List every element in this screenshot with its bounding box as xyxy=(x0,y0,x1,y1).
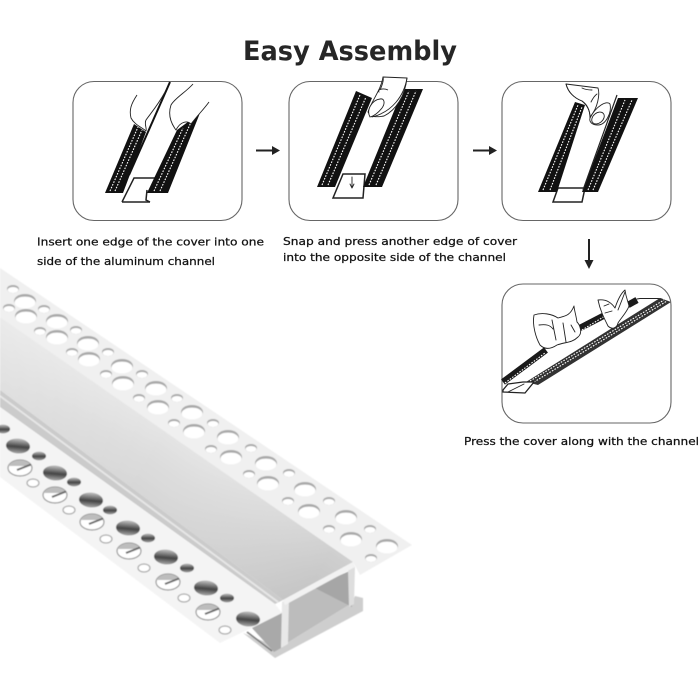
right channel band xyxy=(582,98,638,192)
caption: step 1: side of the aluminum channel xyxy=(37,255,215,268)
left hand finger lines xyxy=(539,320,575,342)
front wall edge xyxy=(281,598,289,648)
channel end profile xyxy=(553,188,585,202)
channel end profile xyxy=(503,382,534,393)
channel hook xyxy=(146,190,150,202)
panel: step 3 press cover xyxy=(502,82,671,220)
lower flange holes xyxy=(0,424,261,634)
cover side strip xyxy=(0,390,283,604)
left channel band xyxy=(538,102,585,192)
left side wall xyxy=(252,612,283,652)
right hand xyxy=(170,84,209,130)
left hand xyxy=(130,92,165,131)
caption: step 1: Insert one edge of the cover into one xyxy=(37,236,264,248)
caption: step 2: Snap and press another edge of cover xyxy=(283,235,518,248)
channel end profile xyxy=(122,178,156,202)
panel: step 1 insert cover xyxy=(73,82,242,220)
right hand finger lines xyxy=(604,292,625,313)
upper flange xyxy=(0,268,412,575)
caption: step 3: Press the cover along with the channel xyxy=(464,435,699,448)
left channel band xyxy=(317,91,372,187)
channel base xyxy=(243,596,363,658)
right channel band xyxy=(363,89,423,187)
diffuser cover xyxy=(0,317,353,600)
right channel band xyxy=(147,113,200,193)
thumb xyxy=(369,89,388,117)
profile section detail xyxy=(508,384,524,392)
back channel band xyxy=(503,300,637,383)
press arrow xyxy=(350,177,354,188)
left channel band xyxy=(105,124,146,193)
hand xyxy=(368,77,407,117)
arrow: step 2 to step 3 xyxy=(473,146,497,155)
right wall edge xyxy=(348,566,355,607)
caption: step 2 xyxy=(283,235,518,264)
thumb xyxy=(590,103,610,125)
strip highlight xyxy=(0,396,278,602)
arrow: step 1 to step 2 xyxy=(256,146,280,155)
front channel band xyxy=(526,298,671,385)
product photo: aluminum channel xyxy=(0,268,412,658)
channel end profile xyxy=(333,174,365,198)
cover front lip xyxy=(283,562,355,605)
upper flange holes xyxy=(3,285,398,562)
left hand xyxy=(533,306,581,348)
caption: step 2: into the opposite side of the channel xyxy=(283,251,506,264)
lower flange xyxy=(0,407,282,643)
right hand xyxy=(598,290,629,328)
panel: step 4 press along channel xyxy=(502,284,671,423)
title: Easy Assembly xyxy=(243,36,457,67)
channel back shade xyxy=(313,570,352,607)
cover lengthwise shading xyxy=(0,317,353,600)
inner channel wall xyxy=(287,570,352,643)
base shadow line xyxy=(247,632,272,651)
arrow: step 3 to step 4 xyxy=(584,239,594,269)
cover edge line xyxy=(129,82,170,175)
cover strip xyxy=(133,82,193,176)
cover top line xyxy=(637,298,662,300)
panel: step 2 snap cover xyxy=(289,77,458,220)
hand xyxy=(566,84,599,117)
caption: step 1 xyxy=(37,236,264,268)
cover edge line xyxy=(583,95,617,190)
